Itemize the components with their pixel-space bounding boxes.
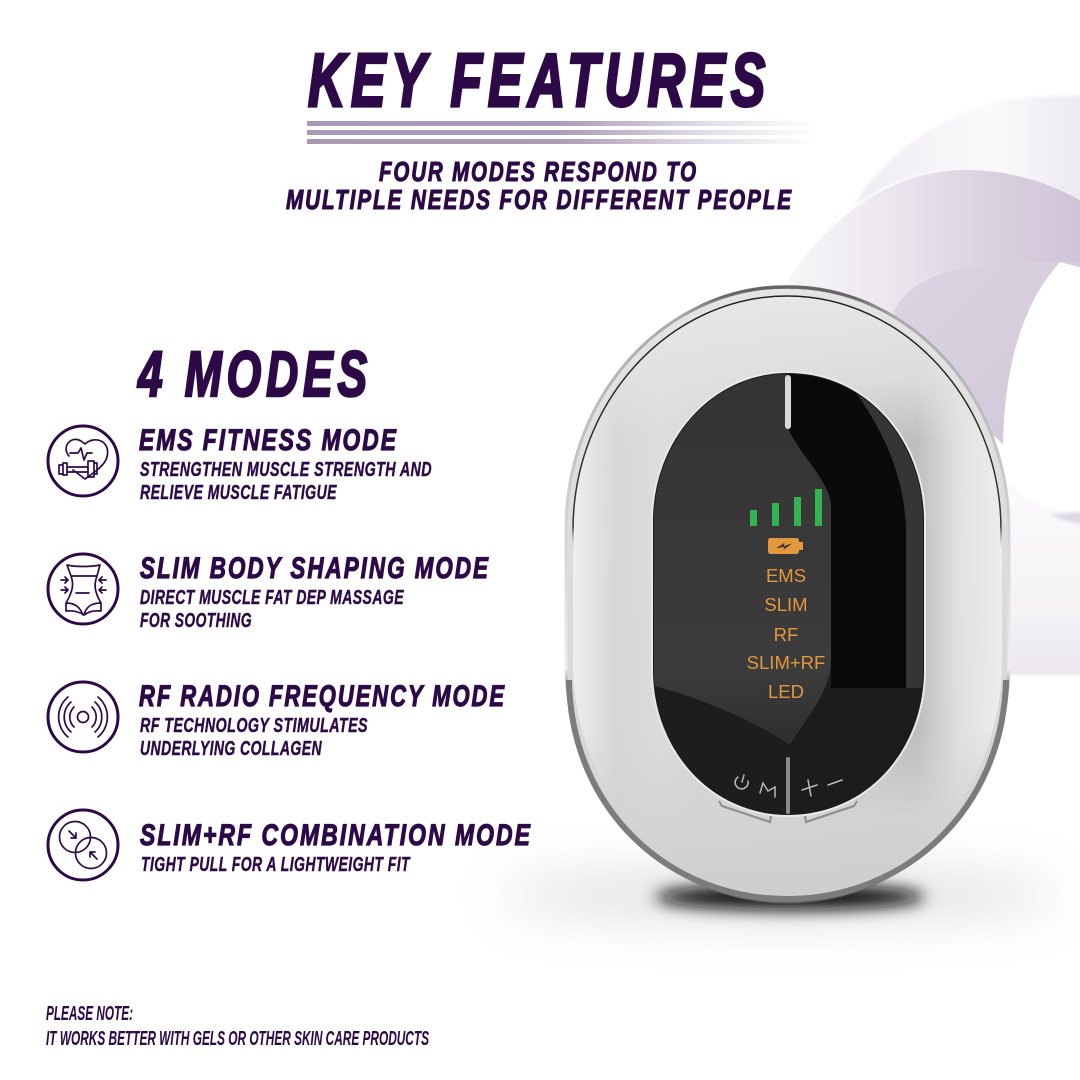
note	[46, 1003, 429, 1050]
heading: 4 modes: 4 MODES	[137, 338, 372, 410]
mode: slim body shaping	[48, 552, 490, 632]
mode labels: SLIM	[764, 594, 808, 615]
mode labels	[747, 565, 825, 702]
mode title: EMS FITNESS MODE	[139, 424, 398, 457]
ribbon: lower band	[893, 262, 1080, 445]
mode description: STRENGTHEN MUSCLE STRENGTH AND	[140, 459, 432, 481]
button: minus	[828, 780, 842, 785]
device	[566, 287, 1009, 902]
ribbon: upper band	[853, 95, 1080, 215]
title: KEY FEATURES	[308, 38, 771, 122]
screen	[654, 374, 923, 745]
bottom clips	[719, 801, 857, 822]
mode description: UNDERLYING COLLAGEN	[140, 738, 322, 760]
signal bars	[750, 489, 822, 526]
icon: heart and dumbbell	[48, 426, 118, 496]
mode labels: LED	[768, 681, 804, 702]
device shell	[566, 287, 1009, 902]
screen: grey right crescent	[856, 394, 923, 688]
mode: EMS fitness	[48, 424, 432, 504]
screen: black right panel	[787, 374, 906, 688]
ribbon: white inner cut-out	[1003, 262, 1080, 445]
title underline stripes	[307, 121, 817, 144]
device shadow	[500, 873, 1060, 917]
top divider	[785, 375, 791, 429]
buttons	[735, 775, 842, 797]
shell shading	[573, 294, 1002, 894]
mode description: FOR SOOTHING	[140, 610, 252, 632]
icon: waist with arrows	[48, 554, 118, 624]
mode title: RF RADIO FREQUENCY MODE	[139, 680, 506, 713]
screen: lighter left panel	[650, 370, 831, 745]
battery icon	[768, 538, 803, 554]
button: plus	[802, 780, 817, 796]
mode labels: SLIM+RF	[747, 652, 825, 673]
button: power	[735, 775, 748, 789]
mode labels: RF	[774, 624, 798, 645]
icon: radio waves	[48, 682, 118, 752]
mode title: SLIM BODY SHAPING MODE	[140, 552, 490, 585]
mode description: RELIEVE MUSCLE FATIGUE	[140, 482, 337, 504]
icon: overlapping circles with arrows	[48, 810, 118, 880]
screen: lower right panel	[831, 688, 887, 690]
mode: slim+RF combination	[48, 810, 532, 880]
bottom divider	[786, 757, 790, 814]
screen ring	[652, 372, 925, 816]
mode description	[140, 459, 432, 504]
note: IT WORKS BETTER WITH GELS OR OTHER SKIN CARE PRODUCTS	[46, 1028, 429, 1050]
ribbon: right lower band	[1008, 480, 1080, 675]
mode description: RF TECHNOLOGY STIMULATES	[140, 715, 368, 737]
subtitle: FOUR MODES RESPOND TO	[379, 156, 698, 187]
button: M	[760, 783, 775, 797]
subtitle: MULTIPLE NEEDS FOR DIFFERENT PEOPLE	[286, 184, 793, 215]
mode: RF radio frequency	[48, 680, 506, 760]
mode description	[140, 715, 368, 760]
shell lower rim	[569, 680, 1006, 899]
shell top and bottom fades	[656, 294, 974, 889]
mode labels: EMS	[766, 565, 806, 586]
subtitle	[286, 156, 793, 215]
note: PLEASE NOTE:	[46, 1003, 133, 1025]
shell top dark edge	[700, 287, 880, 305]
mode description: DIRECT MUSCLE FAT DEP MASSAGE	[140, 587, 404, 609]
background ribbon swirl	[788, 95, 1080, 675]
shell inner line	[573, 296, 1001, 680]
mode description	[140, 587, 404, 632]
ribbon: middle band	[788, 170, 1080, 330]
mode title: SLIM+RF COMBINATION MODE	[140, 819, 532, 852]
ribbon: right lilac streak	[1050, 510, 1080, 524]
mode description: TIGHT PULL FOR A LIGHTWEIGHT FIT	[141, 854, 411, 876]
